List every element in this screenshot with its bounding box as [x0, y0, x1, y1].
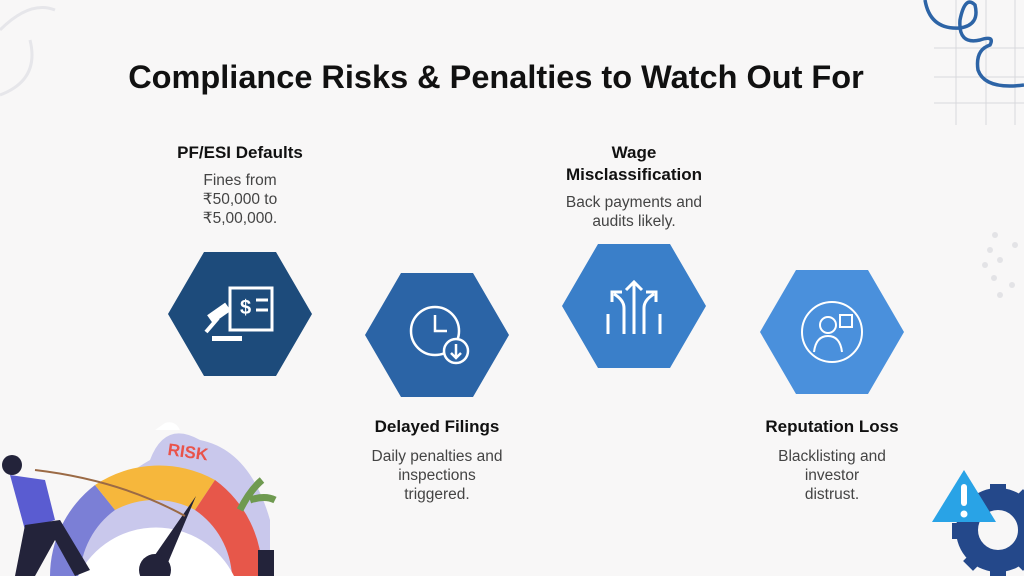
panel: PF/ESI Defaults: ₹50,000 to: [203, 191, 277, 208]
panel: Reputation Loss: Reputation Loss: [765, 417, 899, 436]
panel: Wage Misclassification: Back payments and: [566, 194, 702, 211]
panel: Wage Misclassification: Wage: [612, 143, 656, 162]
panel: Wage Misclassification: audits likely.: [592, 213, 676, 230]
panel: Reputation Loss: Blacklisting and: [778, 448, 886, 465]
icon: warning gear: [932, 470, 1024, 576]
icon: gavel bill hexagon: [168, 252, 312, 376]
icon: clock hexagon: [365, 273, 509, 397]
panel: Delayed Filings: inspections: [398, 467, 476, 484]
panel: PF/ESI Defaults: PF/ESI Defaults: [177, 143, 303, 162]
panel: Reputation Loss: distrust.: [805, 486, 859, 503]
panel: Delayed Filings: [372, 417, 502, 503]
panel: Wage Misclassification: Misclassification: [566, 165, 702, 184]
panel: Delayed Filings: triggered.: [404, 486, 470, 503]
icon: gavel bill hexagon: $: [240, 297, 251, 319]
illustration: risk meter: RISK: [167, 440, 210, 465]
panel: Reputation Loss: [765, 417, 899, 503]
panel: PF/ESI Defaults: Fines from: [203, 172, 277, 189]
icon: blue swirl: [923, 0, 1024, 88]
panel: PF/ESI Defaults: ₹5,00,000.: [203, 210, 277, 227]
panel: Delayed Filings: Daily penalties and: [372, 448, 502, 465]
panel: Delayed Filings: Delayed Filings: [375, 417, 499, 436]
icon: arrows hexagon: [562, 244, 706, 368]
illustration: risk meter: [2, 433, 276, 576]
title: Compliance Risks & Penalties to Watch Out For: [128, 59, 864, 95]
panel: Wage Misclassification: [566, 143, 702, 230]
icon: person hexagon: [760, 270, 904, 394]
panel: PF/ESI Defaults: [177, 143, 303, 227]
panel: Reputation Loss: investor: [805, 467, 859, 484]
